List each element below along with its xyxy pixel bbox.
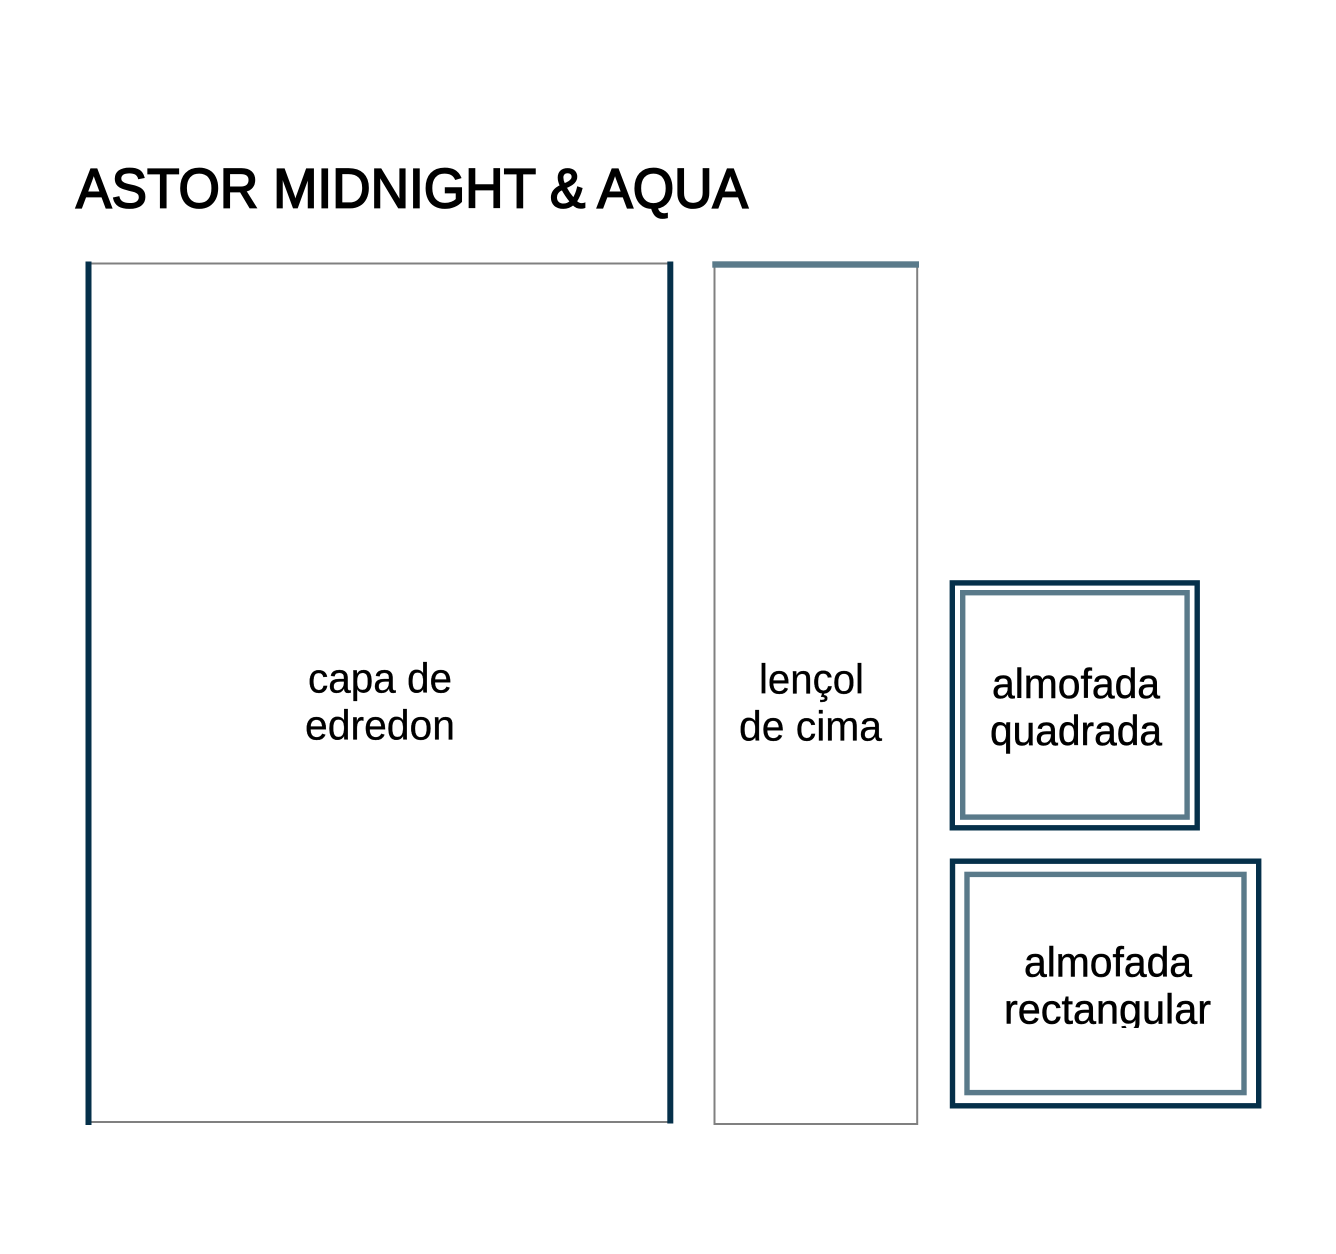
label: almofada quadrada: quadrada: [990, 707, 1163, 754]
panel: lençol de cima: [712, 261, 919, 1124]
label: almofada quadrada: [990, 660, 1163, 754]
label: lençol de cima: lençol: [759, 656, 864, 702]
label: almofada rectangular: rectangular: [1004, 986, 1211, 1032]
panel: almofada rectangular: [952, 861, 1259, 1106]
infographic canvas: [74, 168, 1262, 1125]
label: capa de edredon: [305, 654, 455, 748]
label: almofada rectangular: almofada: [1024, 938, 1193, 986]
label: capa de edredon: capa de: [308, 654, 452, 702]
label: almofada quadrada: almofada: [992, 660, 1161, 707]
label: lençol de cima: [739, 656, 883, 750]
label: lençol de cima: de cima: [739, 702, 883, 750]
panel: capa de edredon: [86, 262, 673, 1125]
label: capa de edredon: edredon: [305, 702, 455, 748]
label: almofada rectangular: [1006, 946, 1211, 1028]
panel: almofada quadrada: [952, 583, 1197, 828]
title: ASTOR MIDNIGHT & AQUA: [76, 156, 749, 220]
